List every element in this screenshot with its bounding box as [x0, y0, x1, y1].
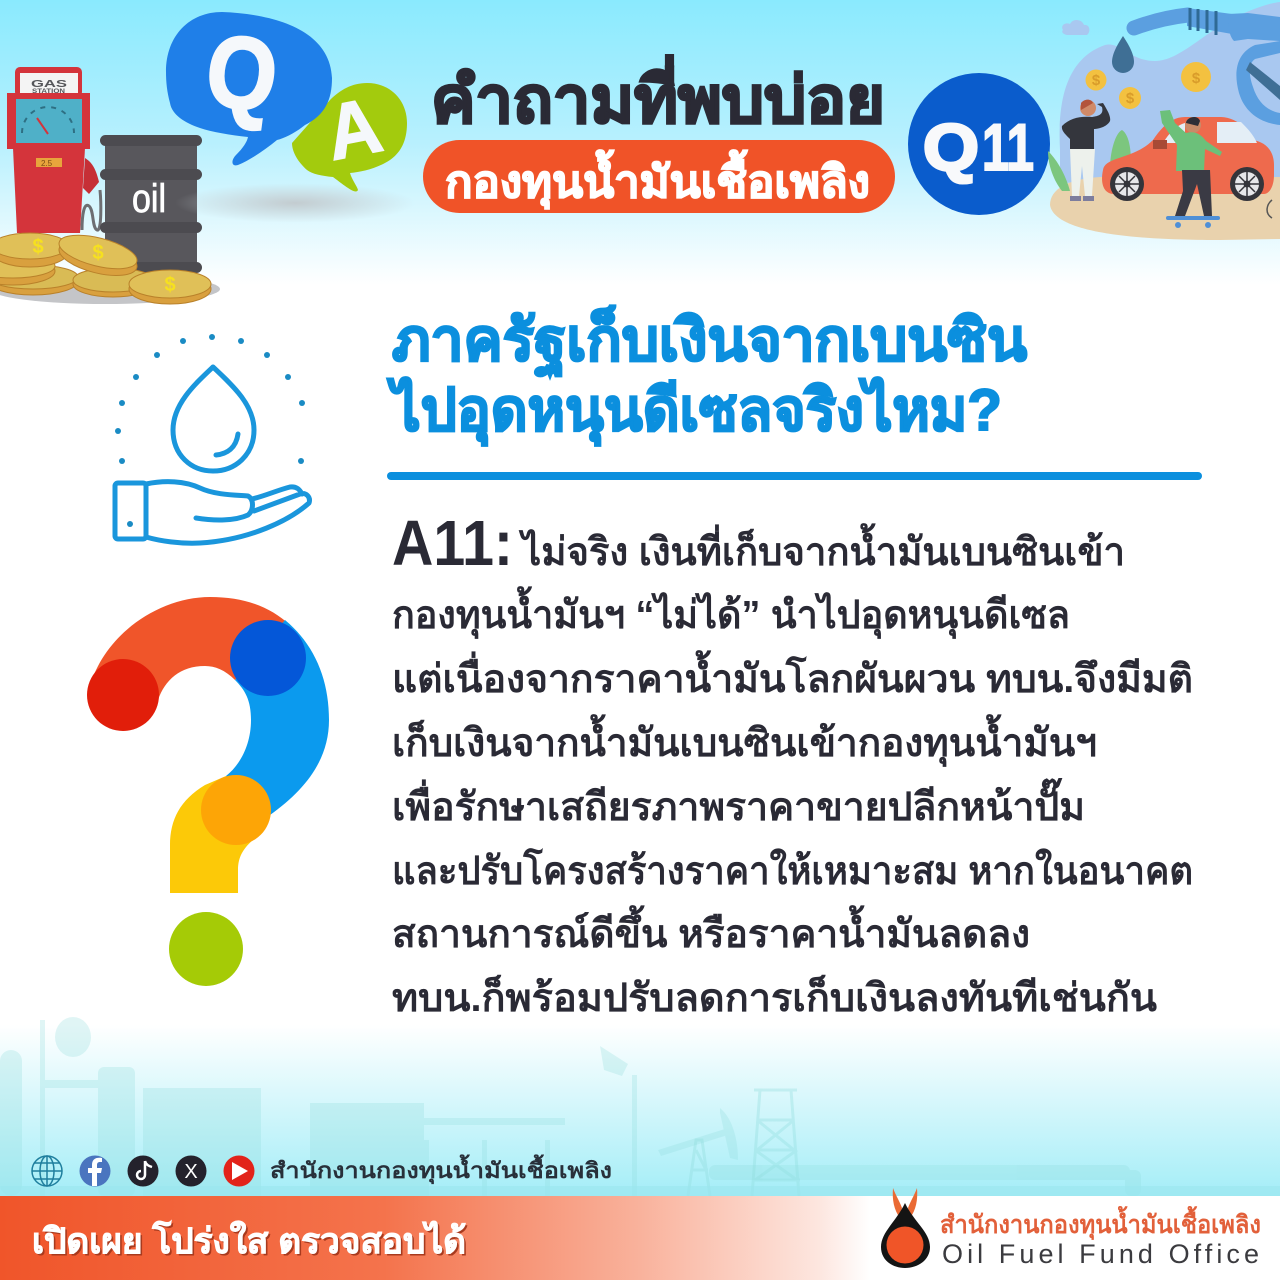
icon: tiktok	[128, 1156, 158, 1186]
question heading	[386, 305, 1027, 447]
icon: gas pump	[7, 67, 101, 233]
icon: gold coins: $	[164, 274, 176, 296]
slogan: เปิดเผย โปร่งใส ตรวจสอบได้	[34, 1222, 468, 1263]
icon: X: X	[184, 1161, 198, 1183]
title: คำถามที่พบบ่อย	[431, 55, 885, 136]
illustration: car, people, fuel nozzle	[1048, 2, 1280, 240]
answer text: กองทุนน้ำมันฯ “ไม่ได้” นำไปอุดหนุนดีเซล	[392, 586, 1070, 639]
icon: gas pump: STATION	[32, 89, 65, 95]
logo: Oil Fuel Fund Office	[881, 1188, 1261, 1269]
icon: A speech bubble: A	[319, 80, 389, 177]
icon: youtube play	[224, 1156, 254, 1186]
icon: hand holding water drop with dots	[115, 334, 309, 543]
icon: gas pump: GAS	[31, 79, 68, 90]
icon: gold coins	[0, 229, 220, 304]
badge: Q11: Q	[923, 110, 979, 184]
badge: Q11	[908, 73, 1050, 215]
speech bubble shadow	[175, 183, 415, 223]
icon: facebook	[80, 1156, 110, 1186]
social icons	[32, 1156, 254, 1186]
subtitle pill	[423, 140, 895, 213]
subtitle pill: กองทุนน้ำมันเชื้อเพลิง	[445, 149, 870, 210]
icon: globe	[32, 1156, 62, 1186]
logo: Oil Fuel Fund Office: Oil Fuel Fund Office	[942, 1239, 1259, 1269]
icon: gold coins: $	[32, 236, 44, 258]
answer text: และปรับโครงสร้างราคาให้เหมาะสม หากในอนาคต	[392, 848, 1193, 893]
illustration: car, people, fuel nozzle: $	[1192, 70, 1201, 87]
illustration: car, people, fuel nozzle: $	[1092, 72, 1101, 89]
divider	[387, 472, 1202, 480]
answer text: เก็บเงินจากน้ำมันเบนซินเข้ากองทุนน้ำมันฯ	[392, 714, 1097, 767]
answer text: ไม่จริง เงินที่เก็บจากน้ำมันเบนซินเข้า	[518, 523, 1125, 574]
organisation name: สำนักงานกองทุนน้ำมันเชื้อเพลิง	[270, 1154, 612, 1185]
icon: A speech bubble	[292, 80, 407, 191]
question heading: ไปอุดหนุนดีเซลจริงไหม?	[386, 377, 1002, 447]
person: standing man	[1062, 100, 1110, 201]
illustration: car, people, fuel nozzle: $	[1126, 90, 1135, 107]
industrial skyline silhouette	[0, 1017, 1280, 1196]
icon: Q speech bubble	[166, 12, 332, 165]
answer text: สถานการณ์ดีขึ้น หรือราคาน้ำมันลดลง	[392, 905, 1030, 956]
answer text: เพื่อรักษาเสถียรภาพราคาขายปลีกหน้าปั๊ม	[392, 778, 1085, 829]
footer band	[0, 1196, 1280, 1280]
question heading: ภาครัฐเก็บเงินจากเบนซิน	[392, 305, 1027, 378]
slogan: เปิดเผย โปร่งใส ตรวจสอบได้	[32, 1220, 466, 1261]
badge: Q11: 11	[982, 110, 1034, 184]
icon: oil barrel	[100, 135, 202, 273]
icon: oil barrel: oil	[132, 177, 166, 221]
icon: X	[176, 1156, 206, 1186]
icon: colorful question mark	[87, 597, 329, 986]
person: skateboarder	[1160, 110, 1222, 228]
logo: Oil Fuel Fund Office: สำนักงานกองทุนน้ำมันเชื้อเพลิง	[940, 1205, 1261, 1241]
icon: Q speech bubble: Q	[200, 12, 284, 134]
answer text: แต่เนื่องจากราคาน้ำมันโลกผันผวน ทบน.จึงมีมติ	[392, 650, 1193, 701]
answer text	[392, 507, 1193, 1020]
answer text: A11:	[392, 507, 513, 579]
icon: gold coins: $	[92, 242, 104, 264]
answer text: ทบน.ก็พร้อมปรับลดการเก็บเงินลงทันทีเช่นกัน	[392, 974, 1157, 1020]
icon: gas pump: 2.5	[41, 159, 53, 168]
